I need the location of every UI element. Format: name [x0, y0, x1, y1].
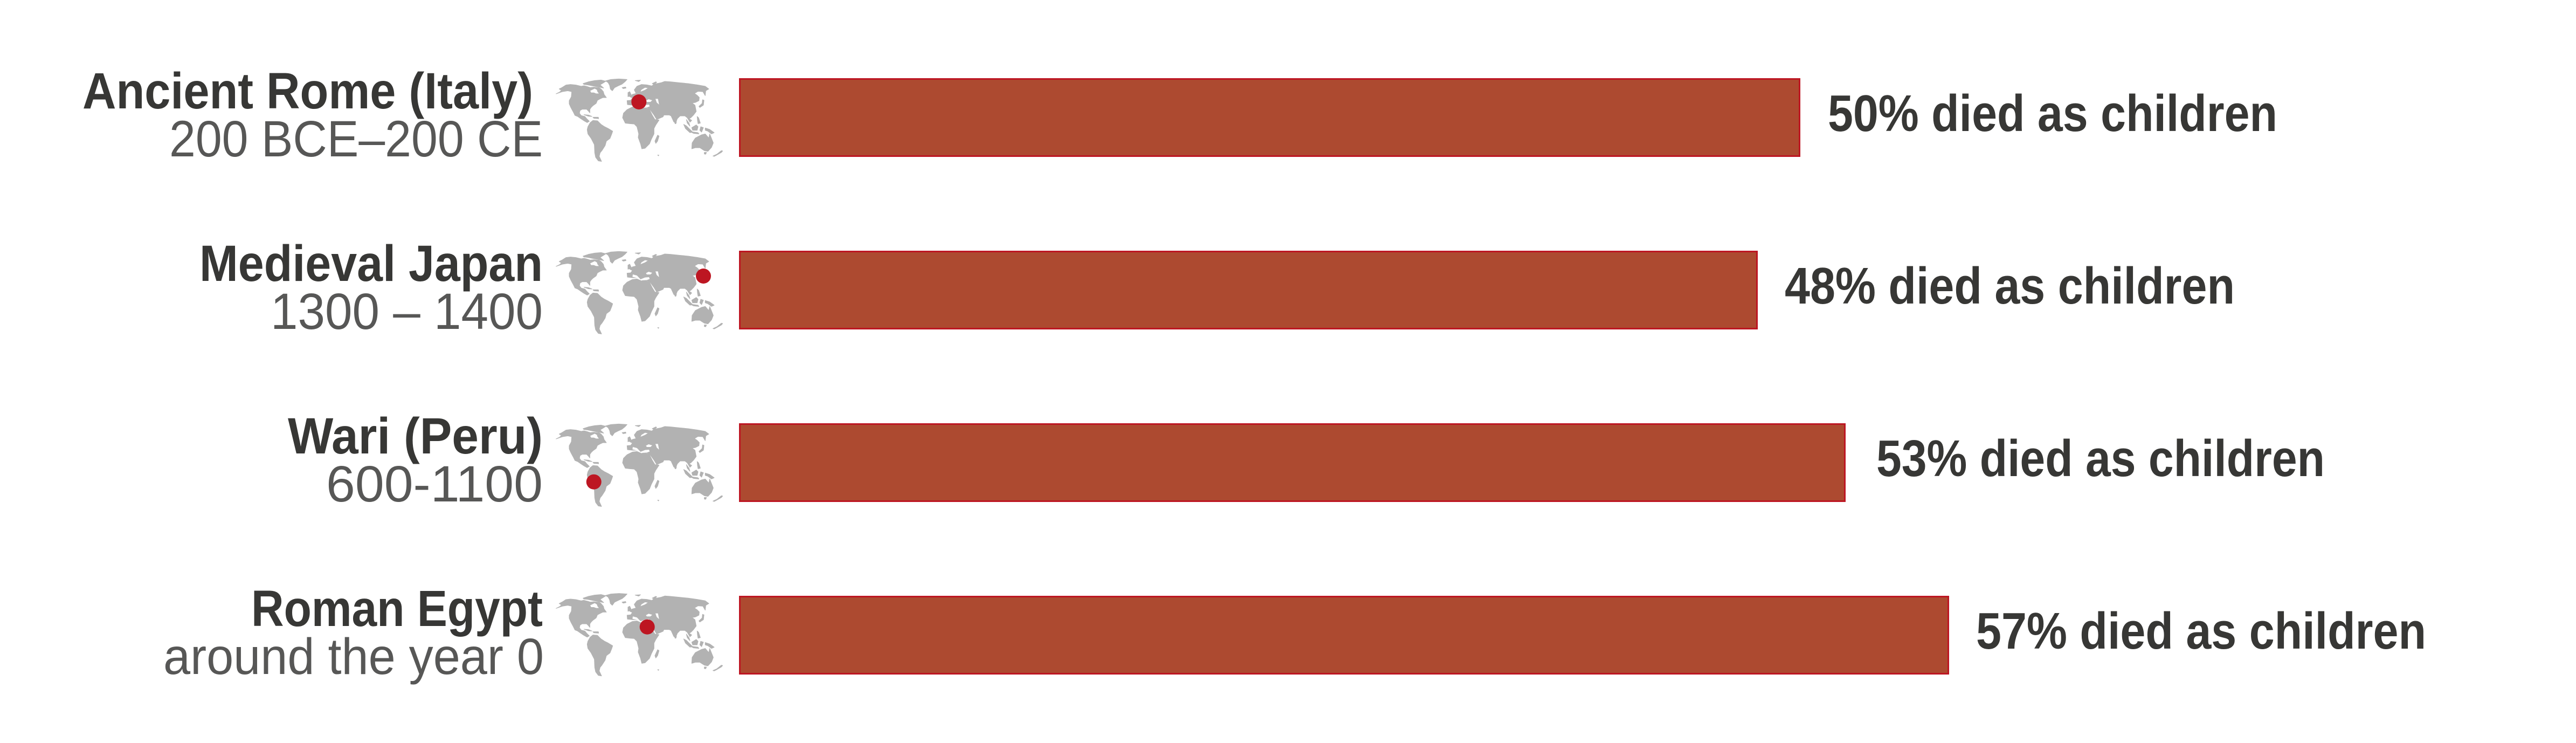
- panel: Medieval Japan row: [199, 235, 2235, 340]
- heading: Ancient Rome (Italy): Ancient Rome (Italy): [82, 63, 533, 120]
- heading: Medieval Japan: Medieval Japan: [199, 235, 543, 292]
- icon: world map with dot on Peru: [556, 424, 723, 506]
- heading: Roman Egypt: Roman Egypt: [251, 580, 543, 637]
- text: 200 BCE–200 CE: 200 BCE–200 CE: [169, 111, 543, 168]
- value label: 57%: 57% died as children: [1976, 602, 2426, 660]
- heading: Wari (Peru): Wari (Peru): [288, 408, 543, 465]
- panel: Wari row: [288, 408, 2325, 513]
- value label: 50%: 50% died as children: [1828, 85, 2277, 142]
- bar: 53%: [740, 424, 1845, 501]
- text: 600-1100: 600-1100: [326, 456, 543, 513]
- bar: 50%: [740, 79, 1799, 156]
- icon: world map with dot on Egypt: [556, 594, 723, 676]
- text: around the year 0: around the year 0: [163, 628, 544, 685]
- value label: 53%: 53% died as children: [1876, 430, 2325, 487]
- panel: Roman Egypt row: [163, 580, 2426, 685]
- value label: 48%: 48% died as children: [1785, 257, 2235, 315]
- icon: world map with dot on Italy: [556, 79, 723, 161]
- text: 1300 – 1400: 1300 – 1400: [271, 283, 543, 340]
- bar: 57%: [740, 596, 1948, 674]
- icon: world map with dot on Japan: [556, 251, 723, 334]
- panel: Ancient Rome row: [82, 63, 2277, 168]
- bar: 48%: [740, 251, 1757, 329]
